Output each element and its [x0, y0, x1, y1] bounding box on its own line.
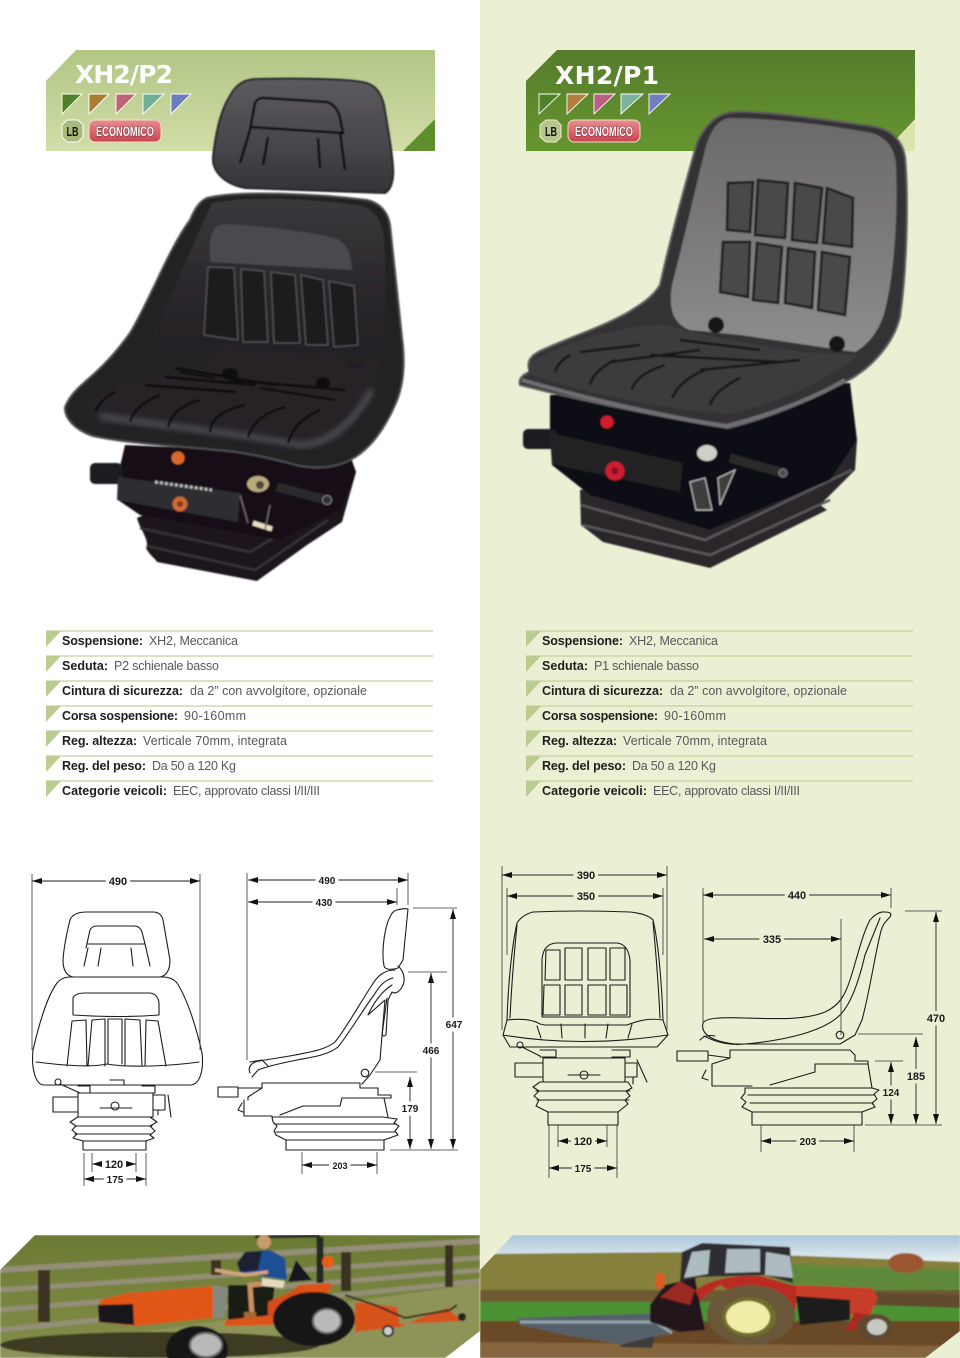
technical drawing: XH2/P1 side view	[677, 888, 945, 1152]
dimension: 185: 185	[907, 1071, 925, 1083]
ECONOMICO badge	[89, 120, 161, 142]
drawing: suspension	[677, 1050, 868, 1086]
dimension: 175	[549, 1125, 617, 1178]
row: Cintura di sicurezza: da 2” con avvolgitore, opzionale	[190, 684, 367, 698]
backrest grid	[720, 180, 853, 315]
dimension: 350	[507, 888, 663, 955]
seat shell and backrest	[520, 112, 907, 428]
row: Reg. del peso: Da 50 a 120 Kg	[152, 759, 236, 773]
headrest	[213, 79, 393, 193]
mechanism	[118, 445, 356, 540]
row: Corsa sospensione: Corsa sospensione:	[62, 709, 178, 723]
colour category triangles	[62, 94, 191, 114]
tractor body	[650, 1278, 705, 1332]
row: Reg. altezza: Verticale 70mm, integrata	[143, 734, 287, 748]
dimension: 390	[502, 866, 667, 1030]
suspension bellows	[137, 472, 356, 581]
row: Cintura di sicurezza: Cintura di sicurezza:	[62, 684, 183, 698]
dimension: 335: 335	[763, 934, 781, 946]
model title XH2/P2: XH2/P2	[75, 60, 173, 89]
dimension: width 490: 490	[109, 876, 127, 888]
specifications list: XH2/P2	[46, 631, 433, 798]
mechanism	[550, 383, 857, 530]
dimension: 175: 175	[575, 1164, 592, 1175]
suspension bellows	[580, 440, 857, 568]
bush	[888, 1253, 924, 1273]
plough	[518, 1313, 672, 1344]
row: Corsa sospensione: Corsa sospensione:	[542, 709, 658, 723]
drawing: suspension	[53, 1093, 171, 1117]
row: Reg. del peso: Reg. del peso:	[62, 759, 146, 773]
row: Categorie veicoli: Categorie veicoli:	[542, 784, 647, 798]
header: XH2/P2	[46, 50, 435, 151]
front wheel	[857, 1314, 893, 1340]
dimension: 466: 466	[423, 1046, 440, 1057]
dimension: 470: 470	[927, 1013, 945, 1025]
ECONOMICO badge	[568, 120, 640, 142]
LB badge: LB	[66, 124, 78, 139]
cushion ridges	[95, 368, 345, 443]
dimension: depth 490: 490	[319, 876, 336, 887]
row: Categorie veicoli: EEC, approvato classi I/II/III	[173, 784, 320, 798]
row: Sospensione: Sospensione:	[62, 634, 143, 648]
wooden fence	[0, 1241, 480, 1330]
LB badge	[62, 120, 83, 142]
row: Sospensione: XH2, Meccanica	[629, 634, 718, 648]
roll bar	[316, 1237, 324, 1283]
dimension: 120	[558, 1125, 607, 1148]
dimension: 175	[84, 1153, 146, 1186]
ECONOMICO badge: ECONOMICO	[96, 124, 154, 139]
dimension: 124	[875, 1061, 903, 1124]
row: Reg. altezza: Reg. altezza:	[542, 734, 617, 748]
row: Corsa sospensione: 90-160mm	[184, 709, 246, 723]
drawing: seat profile	[703, 912, 891, 1044]
row: Cintura di sicurezza: da 2” con avvolgitore, opzionale	[670, 684, 847, 698]
row: Seduta: Seduta:	[542, 659, 588, 673]
ECONOMICO badge: ECONOMICO	[575, 124, 633, 139]
row: Sospensione: Sospensione:	[542, 634, 623, 648]
seat piping	[522, 380, 845, 426]
dimension: 647: 647	[446, 1020, 463, 1031]
row: Categorie veicoli: Categorie veicoli:	[62, 784, 167, 798]
drawing: headrest	[63, 912, 170, 977]
backrest panel	[671, 118, 897, 352]
specifications list: XH2/P1	[526, 631, 913, 798]
dimension: 120: 120	[574, 1136, 592, 1148]
drawing: headrest and backrest profile	[383, 909, 408, 969]
dimension: 647	[390, 908, 463, 1150]
photo: red tractor ploughing a field	[480, 1235, 960, 1358]
row: Reg. del peso: Reg. del peso:	[542, 759, 626, 773]
backrest upper pad	[210, 224, 352, 270]
colour category triangles	[539, 94, 670, 114]
front wheel	[166, 1326, 228, 1358]
row: Reg. altezza: Reg. altezza:	[62, 734, 137, 748]
row: Reg. del peso: Da 50 a 120 Kg	[632, 759, 716, 773]
dimension: 179	[375, 1072, 419, 1149]
technical drawing: XH2/P1 front view	[502, 866, 668, 1178]
dimension: width 490	[32, 874, 200, 1050]
dimension: depth 490	[247, 873, 408, 1060]
dimension: 203: 203	[332, 1161, 348, 1171]
dimension: 179: 179	[402, 1104, 419, 1115]
cab	[680, 1243, 793, 1283]
row: Sospensione: XH2, Meccanica	[149, 634, 238, 648]
row: Categorie veicoli: EEC, approvato classi I/II/III	[653, 784, 800, 798]
row: Seduta: P1 schienale basso	[594, 659, 699, 673]
drawing: suspension	[515, 1058, 647, 1084]
row: Cintura di sicurezza: Cintura di sicurezza:	[542, 684, 663, 698]
row: Corsa sospensione: 90-160mm	[664, 709, 726, 723]
dimension: 350: 350	[577, 891, 595, 903]
photo: orange compact tractor with mower by wooden fence	[0, 1235, 480, 1358]
LB badge	[540, 120, 561, 142]
mower deck	[355, 1302, 462, 1332]
dimension: 120	[92, 1153, 136, 1172]
backrest ribs	[204, 267, 358, 347]
dimension: 203	[302, 1152, 377, 1174]
header: XH2/P1	[526, 50, 915, 151]
dimension: 390: 390	[577, 870, 595, 882]
photo: seat XH2/P1	[520, 112, 907, 568]
tractor	[228, 1285, 275, 1322]
dimension: 124: 124	[883, 1088, 900, 1099]
dimension: 203: 203	[800, 1137, 817, 1148]
backrest and seat shell	[65, 194, 404, 468]
right page background panel	[480, 0, 960, 1358]
dimension: 203	[761, 1125, 854, 1152]
rear wheel	[273, 1292, 355, 1346]
dimension: 120: 120	[105, 1159, 123, 1171]
drawing: seat shell	[503, 911, 668, 1047]
dimension: 175: 175	[107, 1175, 124, 1186]
driver	[237, 1250, 287, 1280]
drawing: suspension	[218, 1083, 391, 1116]
photo: seat XH2/P2 with headrest	[65, 79, 404, 581]
row: Seduta: Seduta:	[62, 659, 108, 673]
dimension: 335	[704, 919, 841, 1035]
rear wheel	[707, 1285, 795, 1345]
dimension: 440	[703, 888, 891, 1022]
drawing: backrest grid	[542, 943, 630, 1017]
seat cushion	[528, 325, 858, 414]
row: Reg. altezza: Verticale 70mm, integrata	[623, 734, 767, 748]
row: Seduta: P2 schienale basso	[114, 659, 219, 673]
dimension: 470	[865, 911, 945, 1125]
cushion	[78, 344, 380, 445]
LB badge: LB	[545, 124, 557, 139]
technical drawing: XH2/P2 side view	[218, 873, 463, 1174]
model title XH2/P1: XH2/P1	[555, 61, 659, 90]
dimension: 185	[858, 1034, 925, 1124]
technical drawing: XH2/P2 front view	[32, 874, 202, 1186]
dimension: 440: 440	[788, 890, 806, 902]
dimension: 430: 430	[316, 898, 333, 909]
